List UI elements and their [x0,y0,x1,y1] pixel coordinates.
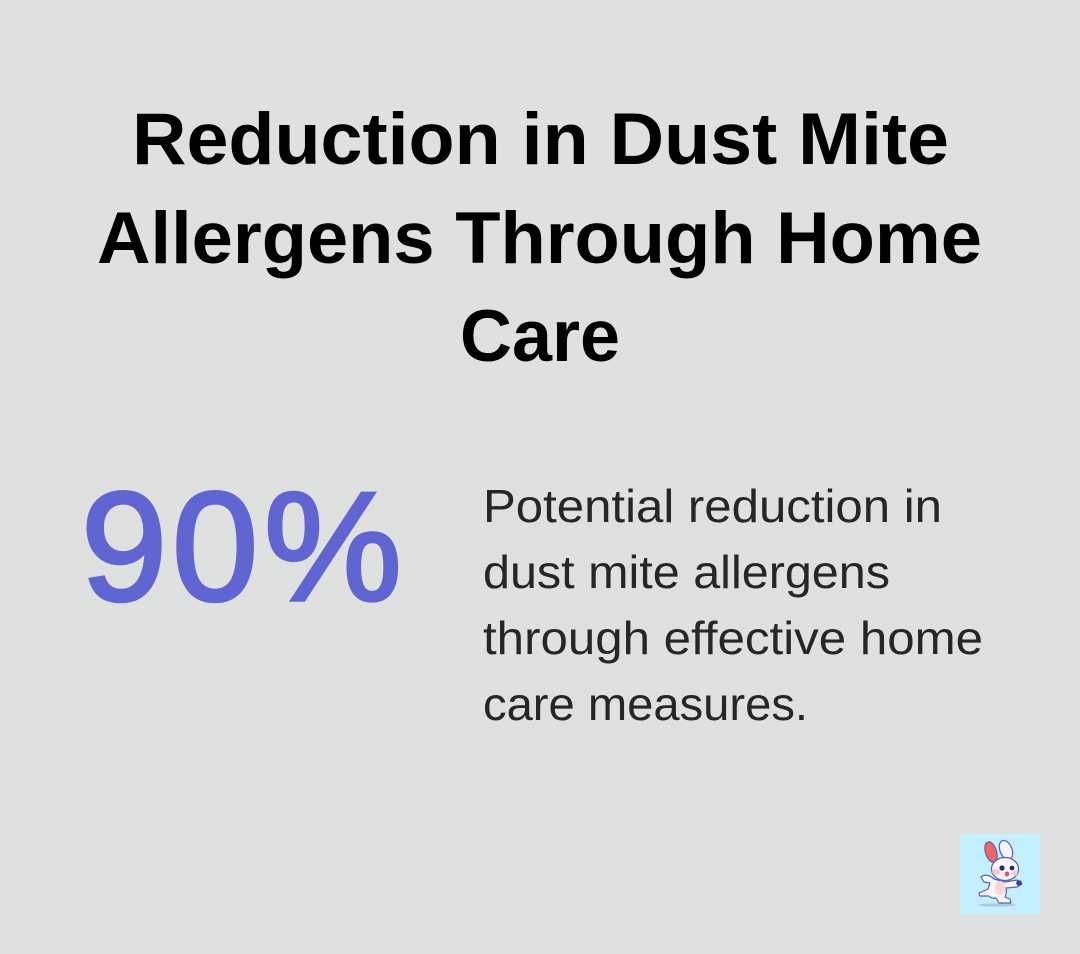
description text: dust mite allergens [483,546,890,598]
description text: through effective home [483,612,983,664]
title [97,99,982,377]
big statistic: 90%: 90% [81,460,402,633]
title: Care [460,296,620,377]
description text: Potential reduction in [483,480,942,532]
title: Allergens Through Home [97,198,982,279]
title: Reduction in Dust Mite [132,99,949,180]
description text [483,480,983,730]
icon: running rabbit logo [960,834,1040,914]
description text: care measures. [483,678,808,730]
